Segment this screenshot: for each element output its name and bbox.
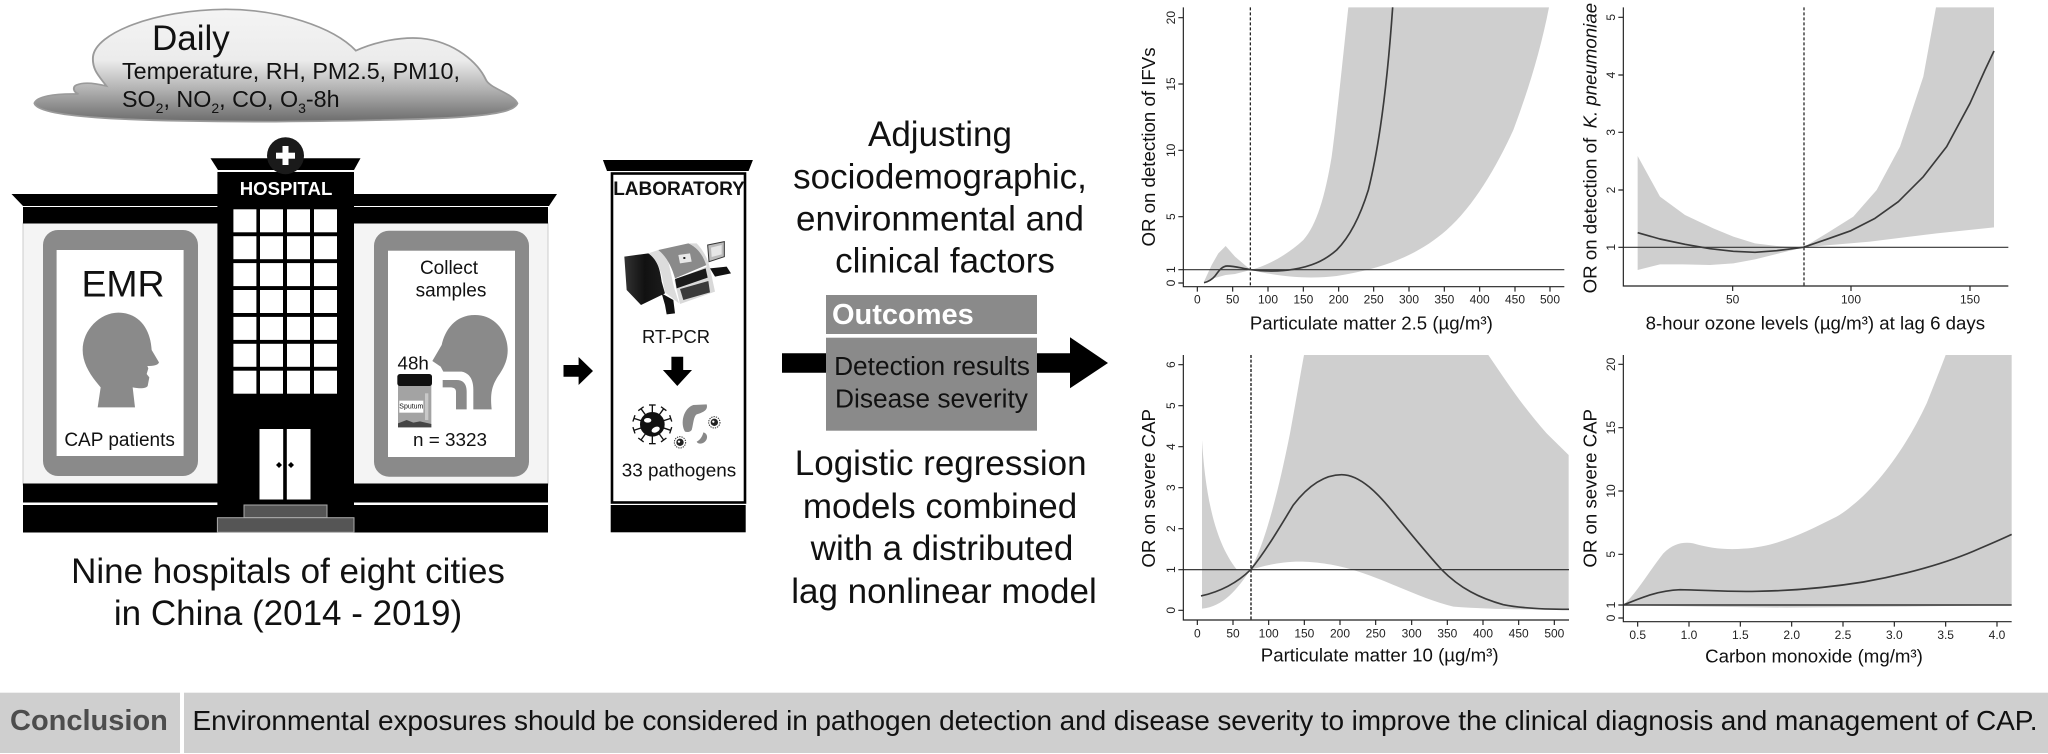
x tick labels: 2.0 [1783,628,1800,642]
hospital tower [217,172,354,505]
chart: ozone vs K. pneumoniae [1580,3,2008,333]
x tick labels: 2.5 [1835,628,1852,642]
reference line at OR 1 [1183,268,1564,271]
outcomes title: Outcomes [832,299,974,331]
icon: sputum jar: Sputum [399,404,424,411]
icon: virus [633,405,672,444]
tower windows [233,209,337,394]
y tick labels [1604,357,1618,621]
y tick labels: 4 [1164,443,1178,450]
icon: RT-PCR machine [624,242,731,314]
panel: collect samples [374,231,529,477]
hospital base [23,484,548,532]
icon: sputum jar [397,374,432,427]
OR curve [1623,534,2012,605]
cloud: daily environmental variables [34,9,517,122]
x tick labels: 400 [1473,627,1493,641]
cloud shape [34,9,517,122]
threshold line [1248,355,1253,620]
x tick labels [1726,292,1980,306]
conclusion label background [0,693,180,753]
x tick labels: 50 [1226,292,1240,306]
x axis title: Particulate matter 10 (µg/m³) [1261,645,1499,666]
conclusion text background [184,693,2048,753]
x tick labels: 4.0 [1989,628,2006,642]
hospital label: HOSPITAL [240,178,332,199]
y tick labels: 0 [1164,279,1178,286]
x tick labels: 300 [1402,627,1422,641]
outcomes header [826,295,1037,334]
outcomes items: Detection results [834,351,1030,381]
outcomes items [834,351,1030,414]
y tick labels [1164,11,1178,286]
48h label: 48h [398,352,429,374]
tower roof [210,158,360,170]
y tick labels: 15 [1604,421,1618,434]
y axis title: OR on detection of IFVs [1138,47,1159,247]
model text: with a distributed [810,529,1073,568]
conclusion label: Conclusion [10,705,168,737]
hospital title: Nine hospitals of eight cities [71,552,505,591]
collect samples heading: samples [416,281,486,302]
cloud heading: Daily [152,19,230,58]
y axis title: OR on severe CAP [1580,409,1601,568]
x tick labels: 350 [1434,292,1455,306]
y tick labels: 1 [1604,244,1618,251]
y tick labels: 6 [1164,361,1178,368]
x tick labels: 300 [1399,292,1419,306]
axes [1618,7,2008,291]
samples panel frame [374,231,529,477]
reference line at OR 1 [1183,568,1569,571]
plus emblem [267,137,304,174]
cloud variables text: -8h [306,86,340,112]
panel: outcomes [826,295,1037,431]
outcomes body [826,338,1037,431]
x tick labels [1194,627,1565,641]
x tick labels [1194,292,1560,306]
x tick labels: 0.5 [1629,628,1646,642]
y tick labels: 5 [1604,14,1618,21]
conclusion bar [0,693,2048,753]
y tick labels: 20 [1604,357,1618,371]
hospital building [12,137,557,532]
x tick labels: 3.5 [1937,628,1954,642]
x tick labels: 150 [1294,627,1315,641]
icon: head with airway [432,315,508,409]
arrow: down [663,357,692,386]
threshold line [1802,7,1806,286]
hospital title: in China (2014 - 2019) [114,594,462,633]
x tick labels: 100 [1258,292,1278,306]
model text [791,444,1097,611]
axes [1618,355,2012,627]
axes [1178,355,1569,625]
chart: carbon monoxide vs severe CAP [1580,355,2012,667]
model text: models combined [803,487,1077,526]
cloud variables text: , NO [163,86,211,112]
y tick labels: 15 [1164,77,1178,91]
y tick labels: 3 [1164,484,1178,491]
hospital title [71,552,505,633]
CAP patients label: CAP patients [64,430,175,451]
y tick labels [1604,14,1618,251]
adjustment text [793,115,1087,280]
cloud variables text: SO [122,86,156,112]
y tick labels: 20 [1164,11,1178,24]
x tick labels: 400 [1470,292,1490,306]
x tick labels: 350 [1437,627,1458,641]
x tick labels: 150 [1293,292,1314,306]
icon: patient head [83,313,159,407]
y tick labels [1164,361,1178,614]
laboratory roof [603,160,753,171]
arrow: laboratory to outcomes and charts [782,337,1108,388]
x tick labels: 3.0 [1886,628,1903,642]
icon: bacteria [674,404,720,448]
laboratory base [611,505,746,532]
panel: laboratory [603,160,753,532]
y tick labels: 0 [1164,607,1178,614]
EMR panel frame [43,230,198,476]
y axis title: OR on detection ofK. pneumoniae [1580,3,1601,293]
y tick labels: 1 [1604,601,1618,608]
adjustment text: sociodemographic, [793,157,1087,196]
hospital wall [23,223,548,485]
EMR heading: EMR [81,263,165,305]
collect samples heading: Collect [420,258,479,279]
chart: PM10 vs severe CAP [1138,355,1569,666]
y tick labels: 1 [1164,566,1178,573]
OR curve [1201,475,1569,609]
y axis title: OR on severe CAP [1138,409,1159,568]
y tick labels: 5 [1164,402,1178,409]
panel: EMR [43,230,198,476]
x tick labels: 0 [1194,292,1201,306]
y tick labels: 2 [1604,186,1618,193]
cloud variables text: , CO, O [219,86,298,112]
confidence band [1623,355,2012,608]
x axis title: Carbon monoxide (mg/m³) [1705,646,1923,667]
x tick labels: 0 [1194,627,1201,641]
y tick labels: 10 [1164,143,1178,157]
sample size: n = 3323 [413,430,487,451]
OR curve [1638,51,1994,252]
cloud variables text: Temperature, RH, PM2.5, PM10, [122,58,460,84]
y tick labels: 1 [1164,266,1178,273]
samples panel interior [388,251,515,457]
chart: PM2.5 vs IFVs [1138,7,1564,333]
reference line at OR 1 [1623,603,2012,607]
OR curve [1204,7,1393,283]
x tick labels: 450 [1509,627,1529,641]
hospital steps [217,505,354,532]
EMR panel interior [57,250,184,456]
x tick labels: 50 [1226,627,1240,641]
x tick labels: 200 [1329,292,1349,306]
confidence band [1202,355,1569,610]
hospital side roof [12,194,557,224]
laboratory label: LABORATORY [613,179,745,200]
x tick labels: 250 [1364,292,1384,306]
y tick labels: 5 [1164,213,1178,220]
x tick labels: 150 [1960,292,1980,306]
x tick labels: 1.5 [1732,628,1749,642]
RT-PCR label: RT-PCR [642,326,710,347]
pathogen count: 33 pathogens [622,461,736,482]
axes [1178,7,1564,292]
confidence band [1638,7,1994,270]
x tick labels: 450 [1505,292,1525,306]
cloud variables text: 2 [211,100,219,116]
adjustment text: clinical factors [835,241,1055,280]
y tick labels: 10 [1604,484,1618,498]
y tick labels: 3 [1604,129,1618,136]
threshold line [1249,7,1252,287]
x tick labels: 1.0 [1681,628,1698,642]
x axis title: 8-hour ozone levels (µg/m³) at lag 6 days [1646,312,1985,333]
y tick labels: 0 [1604,614,1618,621]
y tick labels: 2 [1164,525,1178,532]
y tick labels: 4 [1604,71,1618,78]
x tick labels: 500 [1540,292,1560,306]
model text: Logistic regression [795,444,1087,483]
model text: lag nonlinear model [791,572,1097,611]
x tick labels: 100 [1259,627,1279,641]
x tick labels: 100 [1841,292,1861,306]
x tick labels: 250 [1366,627,1386,641]
x tick labels: 200 [1330,627,1350,641]
arrow: hospital to laboratory [564,357,593,385]
confidence band [1204,7,1549,282]
x tick labels: 50 [1726,292,1740,306]
cloud variables text: 2 [156,100,164,116]
x axis title: Particulate matter 2.5 (µg/m³) [1250,312,1493,333]
cloud variables text: 3 [298,100,306,116]
laboratory frame [612,174,745,502]
adjustment text: Adjusting [868,115,1012,154]
adjustment text: environmental and [796,200,1084,239]
x tick labels [1629,628,2006,642]
x tick labels: 500 [1544,627,1565,641]
y tick labels: 5 [1604,551,1618,558]
cloud variables text [122,58,460,116]
hospital door [260,429,310,500]
reference line at OR 1 [1623,246,2008,249]
conclusion text: Environmental exposures should be considered in pathogen detection and disease severity to improve the clinical diagnosis and management of CAP. [192,705,2038,736]
collect samples heading [416,258,486,302]
outcomes items: Disease severity [835,384,1029,414]
